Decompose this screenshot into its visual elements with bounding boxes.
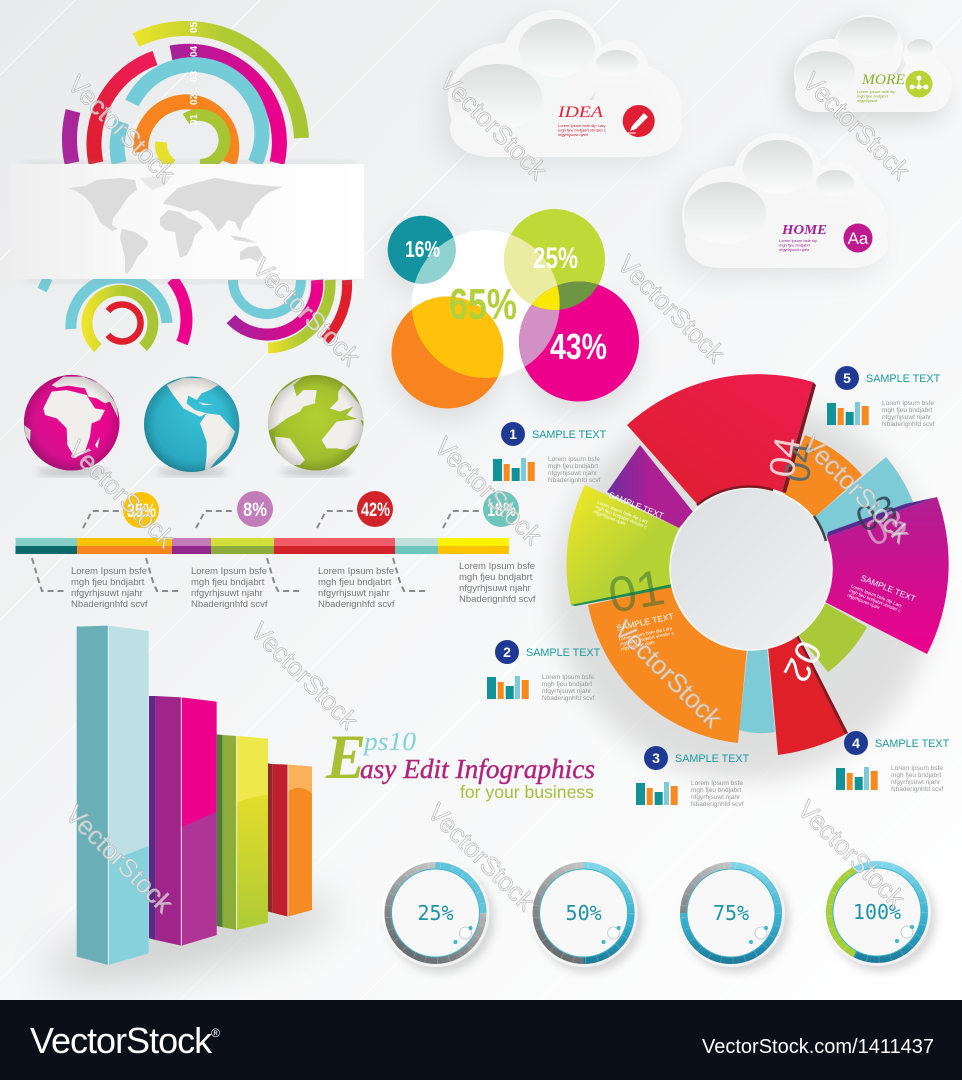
segment: 02 red	[768, 635, 848, 755]
callout 2: Lorem Ipsum bsfe	[542, 674, 594, 681]
gauge 25%	[382, 859, 494, 973]
segment: purple	[607, 445, 693, 528]
callout 3: mgh fjeu bndjabrt	[691, 787, 741, 794]
watermarks	[60, 66, 917, 919]
segment: 03 magenta	[825, 497, 949, 654]
wedge text: orange: Lorem Ipsum bsfe dip Lary	[618, 625, 673, 642]
callout 4: Nbaderignhfd scvf	[891, 786, 944, 793]
title: asy Edit Infographics	[360, 754, 595, 784]
watermarks: VectorStock	[62, 69, 182, 189]
cloud: idea: Lorem Ipsum bsfe dip Lary	[558, 123, 605, 128]
timeline text: Lorem Ipsum bsfe	[71, 566, 147, 577]
bar: orange	[268, 763, 312, 917]
title: for your business	[460, 782, 594, 802]
icon: Aa: Aa	[848, 229, 869, 248]
segment numbers: 01	[604, 559, 669, 624]
segment numbers: 04	[776, 439, 823, 485]
timeline text: Nbaderignhfd scvf	[318, 599, 395, 610]
concentric arcs chart: top: 04	[189, 45, 200, 57]
globe: teal	[144, 377, 239, 472]
timeline text: nfgyrhjsuwt njahr	[318, 588, 390, 599]
watermarks: VectorStock	[797, 429, 917, 549]
callout 3: Nbaderignhfd scvf	[691, 801, 744, 808]
bubble: 18%	[483, 491, 519, 527]
callout 5: 5	[843, 370, 851, 386]
concentric arcs chart: top: 02	[189, 93, 200, 105]
cloud: home: Lorem Ipsum bsfe dip	[779, 238, 818, 243]
cloud: home: mgh fjeu bndjabrt	[779, 242, 811, 248]
cloud: more	[788, 15, 952, 120]
cloud: idea	[438, 10, 682, 165]
callout 1: Nbaderignhfd scvf	[548, 477, 601, 484]
callout 1: SAMPLE TEXT	[532, 429, 607, 441]
watermarks: VectorStock	[609, 614, 729, 734]
globe: magenta	[24, 375, 120, 471]
venn diagram: 25%	[533, 242, 578, 275]
venn diagram: 65%	[449, 280, 517, 329]
callout 2: SAMPLE TEXT	[526, 647, 601, 659]
segment: 04 red	[627, 374, 813, 505]
segment numbers	[604, 434, 913, 689]
concentric arcs chart: lower left	[42, 278, 186, 348]
watermarks: VectorStock	[797, 66, 917, 186]
timeline text: Lorem Ipsum bsfe	[191, 566, 267, 577]
watermarks: VectorStock	[60, 799, 180, 919]
timeline text: Nbaderignhfd scvf	[459, 594, 536, 605]
bar: teal	[77, 626, 149, 965]
callout 4: nfgyrhjsuwt njahr	[891, 779, 941, 786]
cloud: idea: mgh fjeu bndjabrt vbnsler c	[558, 128, 606, 132]
timeline text: Nbaderignhfd scvf	[71, 599, 148, 610]
gauge 50%: 50%	[566, 901, 602, 925]
timeline text: nfgyrhjsuwt njahr	[459, 583, 531, 594]
watermarks: VectorStock	[62, 434, 182, 554]
segment numbers: 03	[859, 500, 913, 554]
callout 4: mgh fjeu bndjabrt	[891, 772, 941, 779]
callout 5: mgh fjeu bndjabrt	[882, 407, 932, 414]
watermarks: VectorStock	[429, 431, 549, 551]
footer bar: VectorStock.com/1411437	[702, 1036, 934, 1058]
callout 3: 3	[652, 750, 660, 766]
cloud: idea: IDEA	[557, 104, 603, 121]
venn diagram	[387, 209, 640, 421]
callout 1: Lorem Ipsum bsfe	[548, 456, 600, 463]
callout 4: Lorem Ipsum bsfe	[891, 765, 943, 772]
timeline text: Nbaderignhfd scvf	[191, 599, 268, 610]
timeline text	[71, 561, 536, 610]
cloud: home: HOME	[781, 223, 827, 238]
title	[325, 721, 595, 802]
gauge 50%	[530, 859, 643, 973]
callout 5: Nbaderignhfd scvf	[882, 421, 935, 428]
timeline text: mgh fjeu bndjabrt	[191, 577, 265, 588]
concentric arcs chart: top: 01	[189, 113, 200, 125]
wedge text: magenta: Lorem Ipsum bsfe dip Lary	[850, 583, 903, 609]
segment numbers: 04	[761, 434, 808, 480]
icon: pencil	[623, 105, 655, 137]
gauge 100%: 100%	[853, 900, 901, 924]
bubble: 35%	[123, 492, 159, 528]
segment: 01 yellow green	[566, 485, 679, 605]
wedge text: yellow: mgh fjeu bndjabrt vbnsler c	[595, 504, 648, 530]
timeline text: Lorem Ipsum bsfe	[459, 561, 535, 572]
gauge 100%	[823, 858, 936, 972]
bubble: 18%: 18%	[487, 500, 516, 521]
bubble: 8%: 8%	[243, 500, 267, 521]
footer bar: ®	[211, 1026, 220, 1040]
bubble: 42%: 42%	[361, 500, 390, 521]
wedge text: magenta: nfgyrhjsuwt njahr	[847, 593, 881, 610]
bar: green	[217, 734, 268, 930]
cloud: home: nfgyrhjsuwt njahr	[779, 247, 810, 252]
footer bar: VectorStock	[30, 1020, 211, 1061]
icon: share nodes	[906, 70, 932, 98]
wedge text: orange: SAMPLE TEXT	[615, 611, 675, 633]
watermarks: VectorStock	[434, 66, 554, 186]
bar: purple	[149, 696, 217, 946]
callout 2: mgh fjeu bndjabrt	[542, 681, 592, 688]
segment: 01 orange	[588, 587, 747, 743]
callout 3: Lorem Ipsum bsfe	[691, 780, 743, 787]
bubble: 35%: 35%	[127, 501, 156, 522]
cloud: home	[672, 133, 888, 276]
cloud: more: mgh fjeu bndjabrt	[857, 94, 889, 98]
venn diagram: 16%	[405, 236, 440, 262]
callout 2: Nbaderignhfd scvf	[542, 695, 595, 702]
callout 2	[487, 640, 601, 702]
cloud: idea: nfgyrhjsuwt njahr	[558, 132, 589, 137]
3D bar chart	[77, 626, 312, 965]
callout 3: nfgyrhjsuwt njahr	[691, 794, 741, 801]
wedge text: orange: nfgyrhjsuwt njahr	[620, 639, 656, 652]
wedge text: yellow: nfgyrhjsuwt njahr	[593, 509, 627, 527]
globe: green	[267, 375, 365, 471]
timeline text: nfgyrhjsuwt njahr	[191, 588, 263, 599]
callout 3: SAMPLE TEXT	[675, 753, 750, 765]
map banner panel	[10, 161, 364, 283]
watermarks: VectorStock	[247, 252, 367, 372]
cloud: more: MORE	[861, 72, 905, 88]
callout 5: SAMPLE TEXT	[866, 373, 941, 385]
wedge text: orange	[615, 611, 679, 652]
callout 5: Lorem Ipsum bsfe	[882, 400, 934, 407]
title: E	[325, 721, 366, 792]
timeline text: nfgyrhjsuwt njahr	[71, 588, 143, 599]
bubble: 42%	[357, 491, 393, 527]
callout 4: 4	[852, 735, 860, 751]
wedge text: yellow: Lorem Ipsum bsfe dip Lary	[596, 500, 649, 525]
segment numbers: 03	[850, 486, 903, 540]
watermarks: VectorStock	[245, 616, 365, 736]
callout 3	[636, 746, 750, 808]
donut wheel chart	[555, 374, 949, 780]
callout 4	[836, 731, 950, 793]
segment: lower blue	[739, 648, 775, 733]
world map	[68, 176, 283, 274]
watermarks: VectorStock	[792, 794, 912, 914]
segment: upper blue	[815, 457, 913, 537]
callout 1: mgh fjeu bndjabrt	[548, 463, 598, 470]
timeline text: mgh fjeu bndjabrt	[459, 572, 533, 583]
concentric arcs chart: top: 05	[189, 21, 200, 33]
timeline text: mgh fjeu bndjabrt	[318, 577, 392, 588]
wedge text: yellow	[593, 487, 665, 538]
callout 5: nfgyrhjsuwt njahr	[882, 414, 932, 421]
bar chart shadow	[42, 881, 338, 999]
timeline text: Lorem Ipsum bsfe	[318, 566, 394, 577]
wedge text: orange: mgh fjeu bndjabrt vbnsler c	[619, 630, 675, 647]
gauge 75%	[677, 859, 790, 973]
cloud: more: nfgyrhjsuwt	[857, 98, 878, 103]
cloud: more: Lorem Ipsum bsfe dip	[857, 89, 896, 94]
callout 2: nfgyrhjsuwt njahr	[542, 688, 592, 695]
wedge text: magenta: SAMPLE TEXT	[859, 573, 917, 604]
callout 1: nfgyrhjsuwt njahr	[548, 470, 598, 477]
concentric arcs chart: top	[70, 21, 302, 165]
segment numbers: 02	[776, 634, 830, 689]
venn diagram: 43%	[550, 326, 607, 367]
inner circle	[670, 487, 832, 650]
timeline bar	[16, 491, 536, 610]
callout 4: SAMPLE TEXT	[875, 738, 950, 750]
callout 2: 2	[503, 644, 511, 660]
watermarks: VectorStock	[422, 797, 542, 917]
watermarks: VectorStock	[612, 249, 732, 369]
gauge 25%: 25%	[417, 901, 454, 925]
wedge text: yellow: SAMPLE TEXT	[607, 490, 665, 521]
concentric arcs chart: lower right	[231, 280, 347, 348]
callout 5	[827, 366, 941, 428]
bubble: 8%	[237, 491, 273, 527]
gauge 75%: 75%	[713, 901, 749, 925]
wedge text: magenta: mgh fjeu bndjabrt vbnsler c	[848, 588, 902, 614]
icon: Aa	[844, 224, 872, 252]
timeline text: mgh fjeu bndjabrt	[71, 577, 145, 588]
callout 1: 1	[509, 426, 517, 442]
segment: upper orange	[782, 435, 862, 517]
footer bar	[0, 1000, 962, 1080]
callout 1	[493, 422, 607, 484]
segment: lower green	[798, 603, 867, 672]
concentric arcs chart: top: 03	[189, 70, 200, 82]
globes	[24, 375, 365, 476]
wedge text: magenta	[847, 570, 917, 621]
title: ps10	[362, 727, 416, 756]
